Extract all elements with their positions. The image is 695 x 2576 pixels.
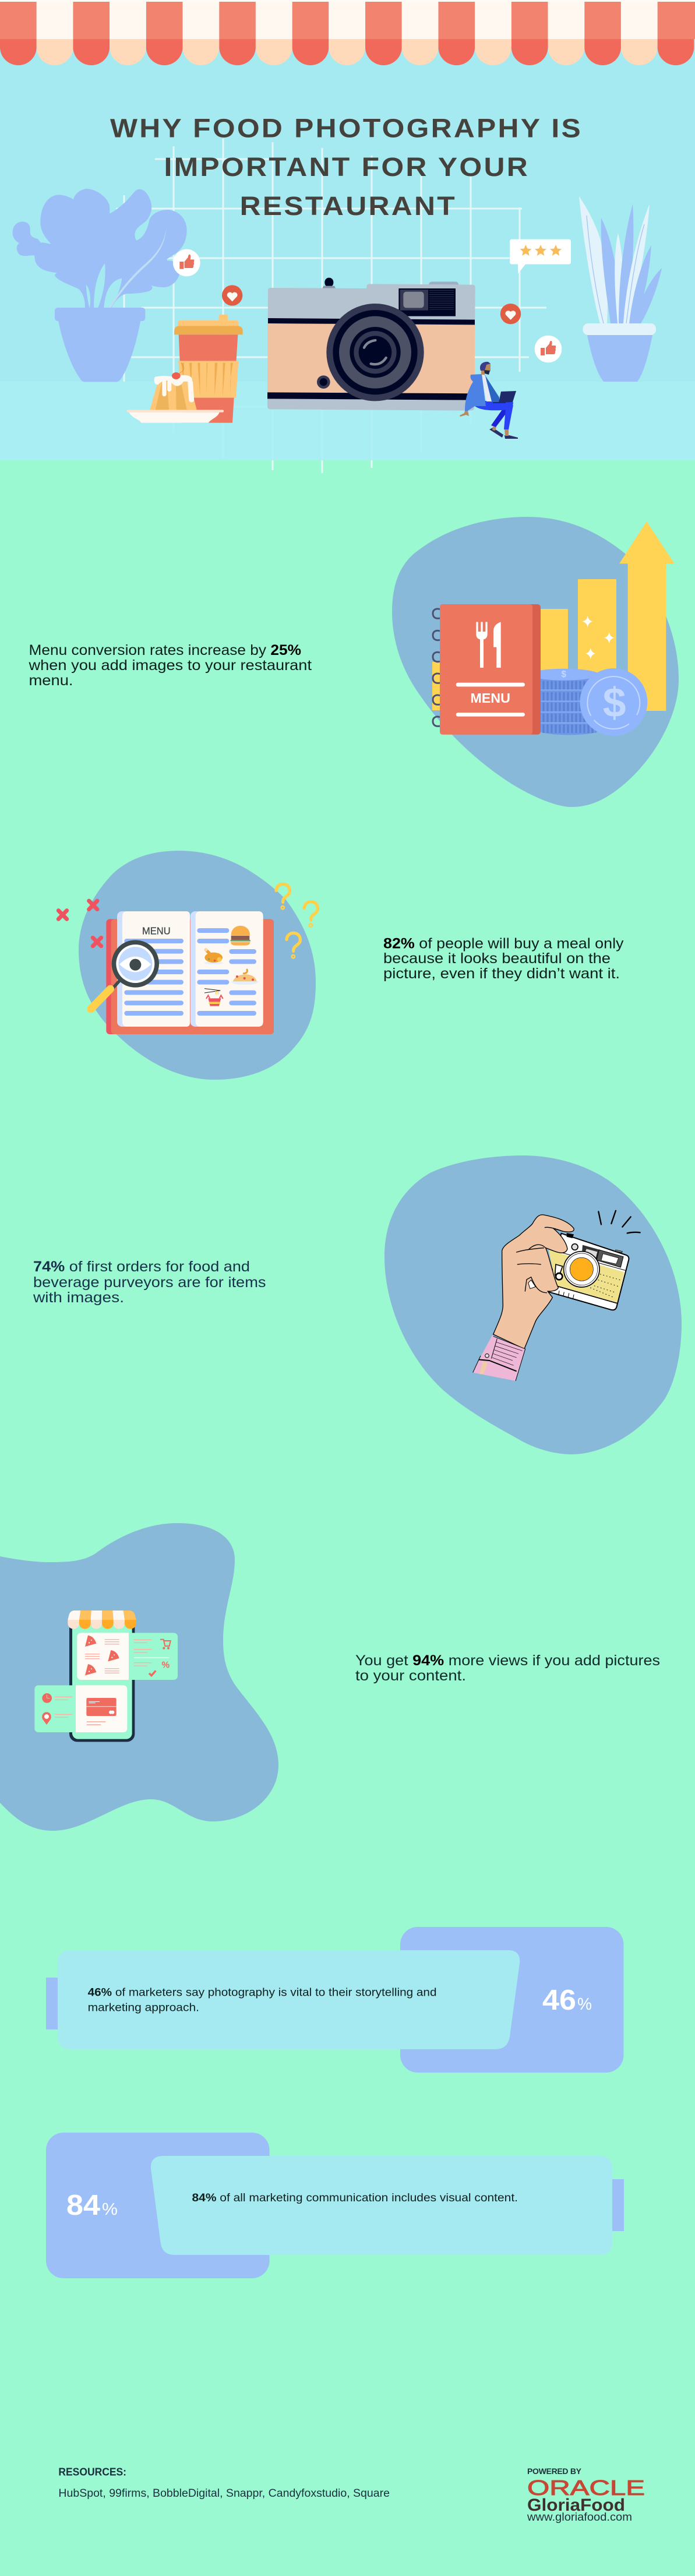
logo: Oracle GloriaFood: www.gloriafood.com [527,2511,632,2524]
icon: thumbs up badge right [535,336,562,362]
cart icon [160,1640,171,1649]
icon: roast chicken [204,948,223,964]
icon: pudding on plate [127,363,224,423]
icon: menu with rising bars and coins [432,521,675,738]
title [110,113,583,221]
stat text: 82%: 82% of people will buy a meal only [383,935,624,952]
resources [58,2466,390,2500]
blob background 3 [384,1155,682,1454]
stat text: 25%: when you add images to your restaurant [28,657,312,674]
value: 84% [66,2190,118,2221]
small tab [611,2179,624,2231]
callout text: marketing approach. [88,2002,199,2014]
panel: 46% callout [46,1927,623,2073]
icon: thumbs up badge left [173,249,200,276]
icon: noodle box [204,989,223,1006]
blob background 2 [79,851,316,1080]
icon: yellow question marks [276,884,317,957]
stat text: 82%: picture, even if they didn’t want it. [383,965,620,982]
stat text: 82% [383,935,624,982]
icon: menu with rising bars and coins: MENU [470,690,510,706]
callout text: 84% of all marketing communication includes visual content. [192,2192,518,2204]
panel: menu conversion stat [28,517,679,807]
panel: 74% stat [33,1155,682,1454]
blue value card [46,2133,270,2278]
cyan text card [58,1950,520,2049]
icon: coffee cup [174,315,243,423]
stat text: 82%: because it looks beautiful on the [383,950,611,967]
stat text: 25%: Menu conversion rates increase by 25% [29,642,301,658]
panel: 82% stat [58,851,624,1080]
title: RESTAURANT [240,191,457,221]
icon: magnifying glass [91,940,159,1009]
icon: burger [231,926,250,946]
stat text: 94%: to your content. [355,1668,466,1684]
value: 84%: 84 [66,2190,100,2221]
phone awning [68,1611,136,1629]
credit card [86,1698,117,1716]
panel: 94% stat [0,1523,660,1831]
cyan text card [151,2156,612,2255]
stat text: 94% [355,1652,660,1684]
icon: open menu with magnifier [58,884,317,1034]
icon: large camera [267,278,475,411]
logo: Oracle GloriaFood: ORACLE [527,2476,645,2500]
small tab [46,1978,59,2029]
blob background 4 [0,1523,278,1831]
icon: right potted plant [579,196,662,382]
icon: hand holding camera [473,1211,640,1381]
icon: heart badge left [222,285,242,306]
stat text: 74% [33,1259,266,1306]
stat text: 94%: You get 94% more views if you add pictures [355,1652,660,1669]
stat text: 74%: with images. [33,1289,124,1306]
panel: 84% callout [46,2133,624,2278]
callout text: 46% of marketers say photography is vital to their storytelling and [88,1987,437,1999]
logo: Oracle GloriaFood [527,2466,645,2524]
value: 46%: % [577,1995,592,2014]
value: 46% [542,1985,592,2016]
stat text: 25%: menu. [29,672,73,689]
pin icon [42,1712,51,1725]
clock icon [42,1693,52,1703]
icon: heart badge right [500,304,521,324]
stat text: 25% [28,642,312,689]
icon: left potted plant [13,189,187,382]
title: IMPORTANT FOR YOUR [164,152,530,182]
blob background 1 [392,517,679,807]
callout text [88,1987,437,2014]
pizza slices [85,1636,119,1675]
resources: HubSpot, 99firms, BobbleDigital, Snappr, Candyfoxstudio, Square [58,2487,390,2500]
panel: header scene [0,0,695,473]
icon: menu with rising bars and coins: $ [603,679,626,726]
icon: open menu with magnifier: MENU [142,925,171,936]
resources: RESOURCES: [58,2466,126,2478]
icon: pasta [231,970,259,985]
stat text: 74%: 74% of first orders for food and [33,1259,250,1275]
icon: red crosses [58,901,101,946]
title: WHY FOOD PHOTOGRAPHY IS [110,113,583,143]
value: 84%: % [102,2200,118,2219]
icon: menu with rising bars and coins: $ [561,669,566,679]
logo: Oracle GloriaFood: GloriaFood [527,2496,625,2515]
icon: phone storefront [34,1611,178,1742]
icon: man with laptop [460,362,518,439]
stat text: 74%: beverage purveyors are for items [33,1274,266,1291]
logo: Oracle GloriaFood: POWERED BY [527,2466,582,2476]
blue value card [400,1927,623,2073]
awning [0,0,695,65]
icon: review stars bubble [510,239,571,274]
value: 46%: 46 [542,1985,576,2016]
icon: phone storefront: % [162,1661,170,1671]
